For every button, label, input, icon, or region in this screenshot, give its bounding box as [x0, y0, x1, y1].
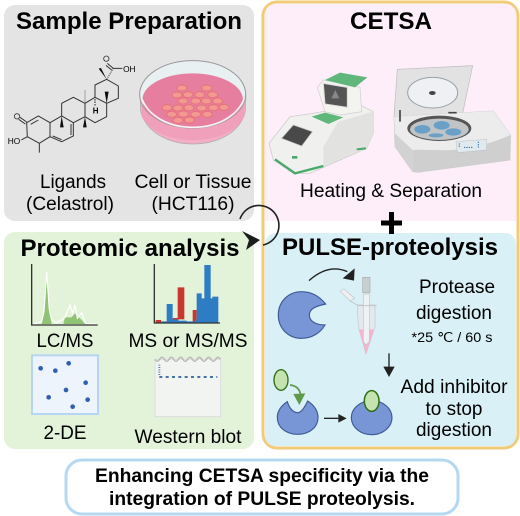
- label: ligands: (Celastrol): [26, 194, 114, 215]
- callout: summary: integration of PULSE proteolysis.: [109, 489, 415, 510]
- panel: CETSA: [265, 4, 516, 221]
- heading: sample preparation: Sample Preparation: [16, 8, 242, 35]
- icon: thermal cycler: [269, 73, 373, 173]
- label: add inhibitor: digestion: [416, 420, 492, 441]
- icon: protease enzyme: [278, 292, 326, 338]
- label: protease digestion: digestion: [416, 303, 492, 324]
- icon: celastrol molecule: H: [93, 106, 99, 115]
- chart: 2-DE gel: [32, 355, 98, 414]
- label: digestion conditions: *25 ℃ / 60 s: [412, 329, 492, 345]
- label: LC/MS: LC/MS: [36, 331, 94, 352]
- label: add inhibitor: to stop: [426, 399, 482, 420]
- heading: PULSE-proteolysis: PULSE-proteolysis: [282, 234, 498, 261]
- callout: summary: Enhancing CETSA specificity via the: [95, 466, 429, 487]
- chart: western blot: [155, 357, 221, 417]
- panel: CETSA and PULSE frame: [263, 2, 518, 448]
- icon: centrifuge: [394, 66, 511, 172]
- label: western blot: Western blot: [134, 427, 242, 448]
- chart: LC/MS trace: [32, 264, 98, 325]
- icon: celastrol molecule: [8, 56, 136, 153]
- label: add inhibitor: Add inhibitor: [400, 377, 508, 398]
- icon: inhibitor binding: [274, 370, 392, 435]
- arrow: down to inhibitor step: [383, 353, 395, 377]
- heading: CETSA: CETSA: [350, 8, 432, 35]
- arrow: protease to tube: [309, 268, 355, 281]
- label: 2-DE: 2-DE: [44, 423, 86, 444]
- icon: petri dish: [140, 61, 246, 144]
- chart: mass spectrum bars: [154, 264, 220, 323]
- label: cell or tissue: Cell or Tissue: [134, 172, 252, 193]
- icon: microcentrifuge tube: [340, 277, 377, 354]
- icon: celastrol molecule: HO: [8, 136, 21, 146]
- panel: PULSE-proteolysis: [265, 233, 516, 446]
- panel: sample preparation: [4, 5, 254, 221]
- icon: celastrol molecule: OH: [123, 64, 136, 74]
- label: cell or tissue: (HCT116): [152, 194, 234, 215]
- label: protease digestion: Protease: [419, 277, 495, 298]
- callout: summary: [66, 460, 458, 514]
- icon: plus sign: [381, 212, 402, 234]
- label: MS or MS/MS: MS or MS/MS: [128, 331, 248, 352]
- label: heating and separation: Heating & Separation: [300, 181, 482, 202]
- heading: proteomic analysis: Proteomic analysis: [20, 235, 240, 262]
- label: ligands: Ligands: [40, 172, 106, 193]
- panel: proteomic analysis: [4, 232, 254, 449]
- arrow: circular to proteomic analysis: [240, 205, 279, 250]
